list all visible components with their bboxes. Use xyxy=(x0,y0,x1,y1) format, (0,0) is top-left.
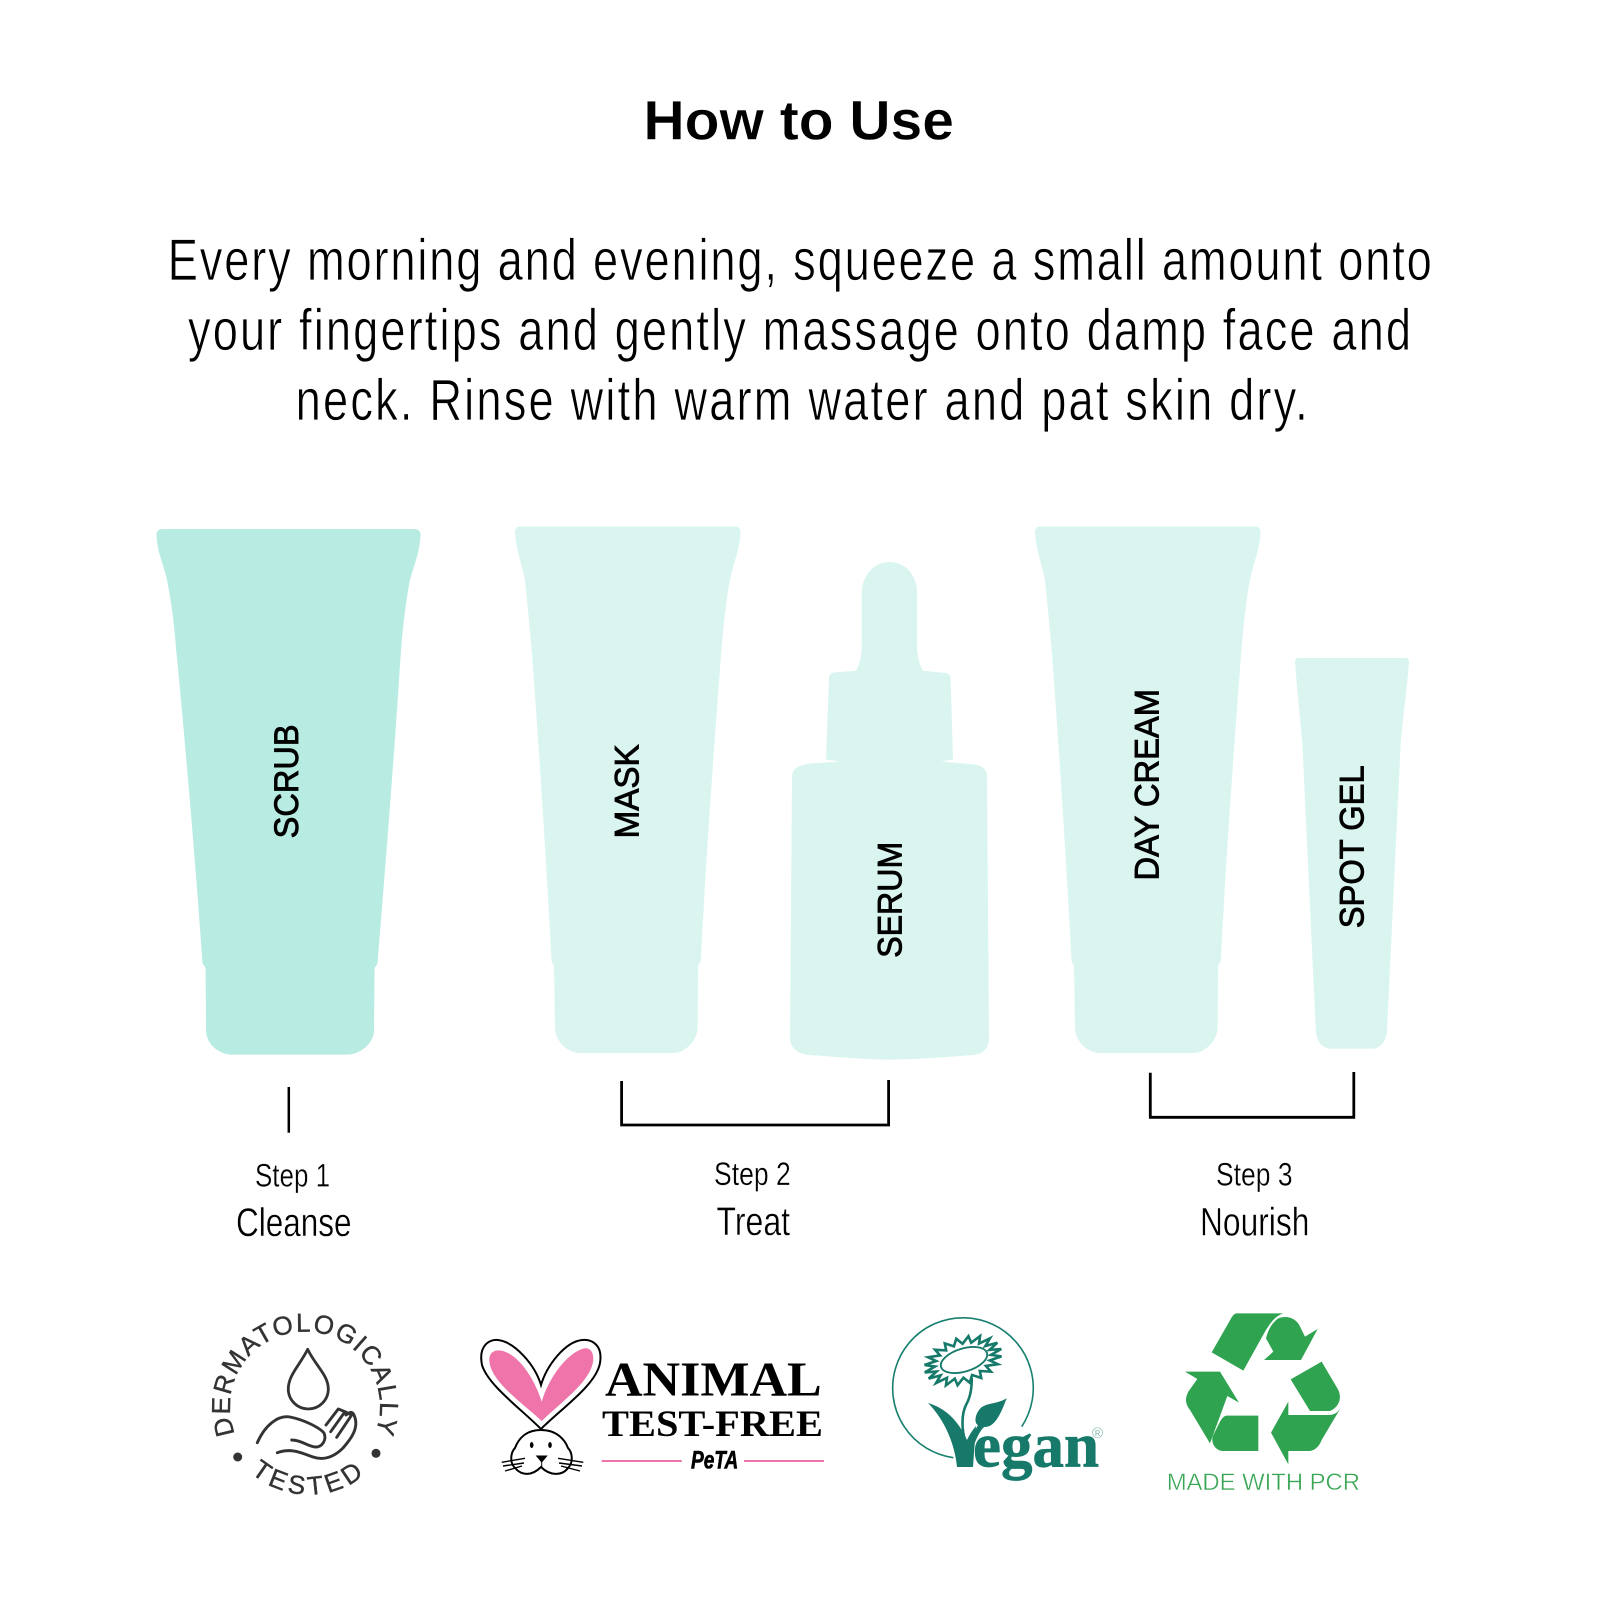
step 3 bracket xyxy=(1150,1072,1354,1117)
icon: bunny ears pink fill xyxy=(489,1348,593,1421)
step 2 label: Treat xyxy=(716,1200,790,1244)
badge: peta animal test-free: ANIMAL xyxy=(605,1352,822,1407)
step 2 label xyxy=(714,1156,791,1244)
icon: bunny ears heart xyxy=(481,1340,601,1429)
icon: recycling arrows xyxy=(1185,1313,1341,1464)
product: serum dropper bottle: SERUM xyxy=(872,842,910,958)
step 1 label: Step 1 xyxy=(255,1158,330,1194)
product: day cream tube: DAY CREAM xyxy=(1128,689,1166,880)
icon: bunny head xyxy=(502,1430,583,1474)
badge: made with pcr recycling: MADE WITH PCR xyxy=(1167,1469,1360,1496)
badge: vegan: egan xyxy=(973,1410,1099,1481)
badge: vegan: ® xyxy=(1092,1425,1103,1442)
step 1 connector xyxy=(288,1087,290,1133)
product: spot gel tube: SPOT GEL xyxy=(1334,765,1372,928)
instructions text block: Every morning and evening, squeeze a small amount onto xyxy=(168,229,1432,293)
icon: open hand xyxy=(257,1409,356,1458)
instructions text block: your fingertips and gently massage onto damp face and xyxy=(188,299,1411,363)
icon: sunflower xyxy=(918,1327,1008,1441)
instructions text block xyxy=(168,229,1432,433)
badge: dermatologically tested: TESTED xyxy=(256,1458,360,1495)
step 1 label xyxy=(236,1158,352,1245)
product: spot gel tube xyxy=(1295,658,1409,1049)
badge: peta animal test-free: PeTA xyxy=(691,1446,738,1474)
step 3 label: Step 3 xyxy=(1216,1157,1293,1193)
product: day cream tube xyxy=(1035,526,1260,1053)
step 1 label: Cleanse xyxy=(236,1201,352,1245)
title: How to Use xyxy=(644,88,954,152)
badge: made with pcr recycling xyxy=(1167,1313,1360,1496)
product: scrub tube xyxy=(156,529,420,1055)
step 2 label: Step 2 xyxy=(714,1156,791,1192)
icon: water drop xyxy=(288,1349,328,1409)
product: serum dropper bottle xyxy=(790,562,989,1060)
badge: dermatologically tested: DERMATOLOGICALLY xyxy=(212,1314,398,1437)
step 3 label xyxy=(1200,1157,1309,1245)
badge: peta animal test-free xyxy=(481,1340,824,1474)
step 3 label: Nourish xyxy=(1200,1201,1309,1245)
badge: peta animal test-free: TEST-FREE xyxy=(602,1404,823,1445)
badge: dermatologically tested xyxy=(212,1314,398,1495)
product: mask tube xyxy=(515,526,740,1053)
product: scrub tube: SCRUB xyxy=(268,724,306,838)
badge: vegan xyxy=(893,1318,1103,1481)
instructions text block: neck. Rinse with warm water and pat skin dry. xyxy=(296,369,1308,433)
icon: V stroke xyxy=(928,1403,976,1467)
product: mask tube: MASK xyxy=(608,744,646,838)
icon: leaf xyxy=(970,1398,1007,1445)
step 2 bracket xyxy=(622,1080,889,1125)
